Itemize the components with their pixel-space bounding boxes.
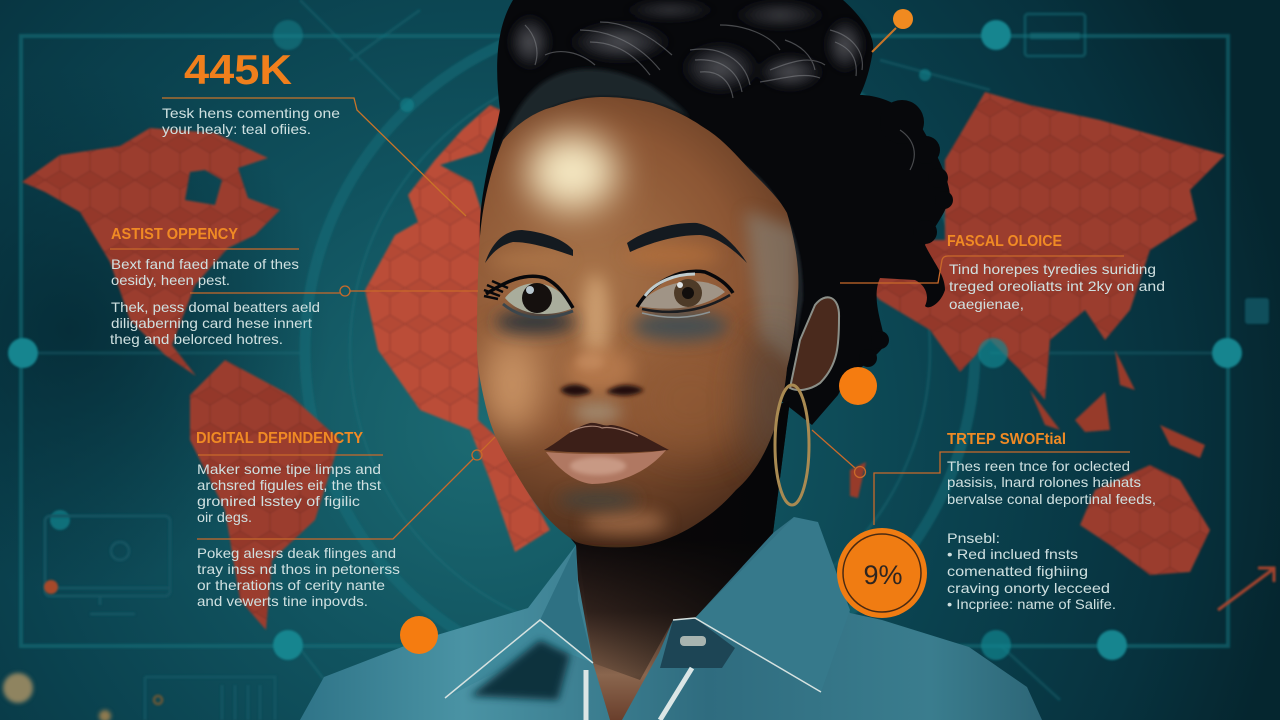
text block: bervalse conal deportinal feeds, xyxy=(947,491,1156,507)
icon: monitor top right xyxy=(1025,14,1085,56)
text block: archsred figules eit, the thst xyxy=(197,477,381,493)
callout: Trtep Swoftial xyxy=(812,430,1156,612)
right collar edge xyxy=(673,618,821,692)
below lip shadow xyxy=(558,491,638,509)
left under-collar shadow xyxy=(470,640,570,700)
left collar flap xyxy=(445,620,593,698)
leader line xyxy=(162,98,466,216)
orange marker: top right with connector xyxy=(872,9,913,52)
jaw shadow xyxy=(576,542,656,547)
left eye xyxy=(484,276,573,318)
map: North America xyxy=(22,128,280,376)
forehead highlight xyxy=(527,134,617,210)
icon: monitor alert dot xyxy=(44,580,58,594)
callout: Digital Dependency xyxy=(196,430,495,609)
left eyebrow xyxy=(485,230,573,263)
icon: small screen right edge xyxy=(1245,298,1269,324)
leader lines xyxy=(110,249,478,296)
right placket xyxy=(660,618,735,668)
text block: craving onorty lecceed xyxy=(947,580,1110,596)
under-eye shadows xyxy=(495,310,575,334)
description xyxy=(162,105,340,137)
heading: DIGITAL DEPINDENCTY xyxy=(196,430,363,447)
text block xyxy=(110,256,320,347)
icon: glow bottom xyxy=(99,710,111,720)
text block: • Incpriee: name of Salife. xyxy=(947,596,1116,612)
orange marker: ear xyxy=(839,367,877,405)
neck xyxy=(540,400,790,720)
map: islands xyxy=(850,350,1205,498)
eyelid warm xyxy=(624,245,720,265)
icon: glow bottom left xyxy=(3,673,33,703)
world map xyxy=(22,92,1225,630)
hair strands xyxy=(525,22,914,170)
icon: device bottom left xyxy=(145,677,275,720)
philtrum highlight xyxy=(573,401,621,423)
earring xyxy=(775,385,809,505)
nose bridge highlight xyxy=(582,275,610,365)
description: your healy: teal ofiies. xyxy=(162,121,311,137)
text block: Pnsebl: xyxy=(947,530,1000,546)
right eyebrow xyxy=(627,223,747,263)
text block: oaegienae, xyxy=(949,296,1024,312)
text block: pasisis, lnard rolones hainats xyxy=(947,474,1141,490)
text block: Pokeg alesrs deak flinges and xyxy=(197,545,396,561)
hair mass xyxy=(480,0,950,425)
lips xyxy=(544,423,669,484)
text block: treged oreoliatts int 2ky on and xyxy=(949,278,1165,294)
text block: Thek, pess domal beatters aeld xyxy=(111,299,320,315)
right cheek grey xyxy=(745,330,795,470)
map: Australia xyxy=(1080,465,1210,575)
right collar xyxy=(695,517,850,692)
hair short fringe xyxy=(490,69,690,190)
hair curls xyxy=(859,100,953,367)
orange marker: bottom left xyxy=(400,616,438,654)
text block: and vewerts tine inpovds. xyxy=(197,593,368,609)
left collar back xyxy=(540,545,593,663)
map: Asia xyxy=(860,92,1225,400)
text block: oesidy, heen pest. xyxy=(111,272,230,288)
heading: TRTEP SWOFtial xyxy=(947,431,1066,448)
heading: ASTIST OPPENCY xyxy=(111,226,238,243)
text block xyxy=(947,458,1156,612)
right eye xyxy=(637,271,733,317)
stat number: 445K xyxy=(184,46,292,93)
badge: 9%: 9% xyxy=(863,560,903,590)
shirt white strips xyxy=(586,668,692,720)
face xyxy=(476,97,798,548)
text block: • Red inclued fnsts xyxy=(947,546,1078,562)
shirt button xyxy=(680,636,706,646)
shaved temple xyxy=(720,150,803,345)
ear xyxy=(790,297,839,390)
callout: Fascal Oloice xyxy=(840,233,1165,312)
temple grey sheen xyxy=(745,210,800,370)
text block: Thes reen tnce for oclected xyxy=(947,458,1130,474)
left collar edge xyxy=(445,620,593,698)
arrow: rising red xyxy=(1218,568,1274,610)
callout: 445K xyxy=(162,46,466,216)
hair braids xyxy=(506,0,867,96)
badge: 9% xyxy=(837,528,927,618)
leader lines xyxy=(812,430,1130,525)
leader line xyxy=(840,256,1124,283)
icon: monitor bottom left xyxy=(45,516,170,614)
text block: gronired lsstey of figilic xyxy=(197,493,360,509)
heading: FASCAL OLOICE xyxy=(947,233,1062,250)
text block: or therations of cerity nante xyxy=(197,577,385,593)
map: Europe and Africa xyxy=(365,105,550,552)
shirt xyxy=(300,517,1042,720)
chin highlight xyxy=(583,510,667,534)
text block: Maker some tipe limps and xyxy=(197,461,381,477)
text block: tray inss nd thos in petonerss xyxy=(197,561,400,577)
leader lines xyxy=(197,437,495,539)
nose xyxy=(560,348,644,396)
right cheek xyxy=(667,384,744,460)
text block: comenatted fighiing xyxy=(947,563,1088,579)
text block xyxy=(197,461,400,609)
text block: Bext fand faed imate of thes xyxy=(111,256,299,272)
text block: diligaberning card hese innert xyxy=(111,315,312,331)
text block xyxy=(949,261,1165,312)
text block: Tind horepes tyredies suriding xyxy=(949,261,1156,277)
neck shadow xyxy=(560,400,790,680)
text block: oir degs. xyxy=(197,509,252,525)
portrait xyxy=(300,0,1042,720)
left cheek xyxy=(482,335,542,435)
map: South America xyxy=(190,360,340,630)
callout: Astist Oppency xyxy=(110,226,478,347)
text block: theg and belorced hotres. xyxy=(110,331,283,347)
description: Tesk hens comenting one xyxy=(162,105,340,121)
